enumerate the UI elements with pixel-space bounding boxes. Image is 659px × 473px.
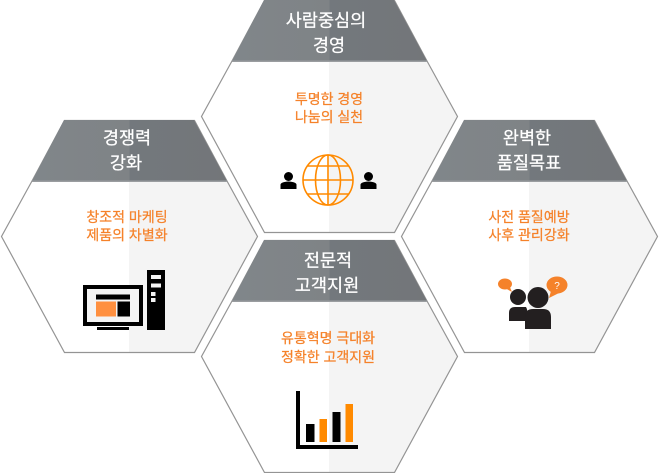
heading: quality goals: 품질목표 bbox=[497, 153, 561, 173]
text: quality goals details: 사후 관리강화 bbox=[488, 227, 570, 243]
text: customer support details: 유통혁명 극대화 bbox=[281, 330, 375, 346]
text: competitiveness details: 창조적 마케팅 bbox=[86, 209, 168, 225]
heading: people-centred management: 경영 bbox=[313, 36, 345, 56]
heading: quality goals: 완벽한 bbox=[503, 128, 551, 148]
icon: globe with two people bbox=[280, 155, 376, 205]
heading: professional customer support: 고객지원 bbox=[295, 276, 359, 296]
icon: two people with speech bubbles bbox=[498, 276, 568, 329]
icon: two people with speech bubbles: ? bbox=[554, 281, 560, 292]
panel: left hexagon, competitiveness bbox=[2, 120, 258, 352]
text: competitiveness details: 제품의 차별화 bbox=[86, 227, 168, 243]
heading: competitiveness: 경쟁력 bbox=[103, 128, 151, 148]
heading: professional customer support: 전문적 bbox=[304, 250, 352, 270]
panel: bottom hexagon, professional customer support bbox=[202, 240, 458, 472]
panel: right hexagon, quality goals bbox=[402, 120, 658, 352]
text: customer support details: 정확한 고객지원 bbox=[281, 349, 375, 365]
text: people-centred details: 투명한 경영 bbox=[295, 91, 363, 107]
text: quality goals details: 사전 품질예방 bbox=[488, 209, 570, 225]
heading: people-centred management: 사람중심의 bbox=[286, 10, 366, 30]
heading: competitiveness: 강화 bbox=[110, 153, 142, 173]
text: people-centred details: 나눔의 실천 bbox=[295, 109, 363, 125]
icon: desktop computer bbox=[83, 270, 165, 330]
panel: top hexagon, people-centred management bbox=[202, 0, 458, 232]
icon: bar chart bbox=[296, 391, 358, 449]
